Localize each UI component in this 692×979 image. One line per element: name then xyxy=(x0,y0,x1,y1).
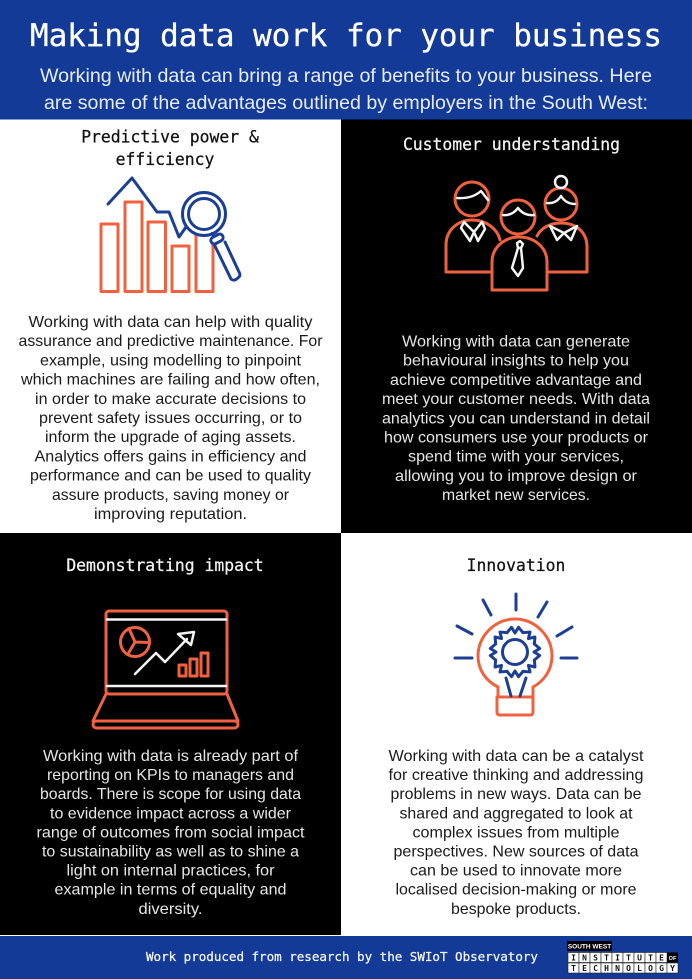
body text: predictive power xyxy=(18,314,323,523)
body text: customer understanding xyxy=(382,334,650,504)
body text: customer understanding: analytics you can understand in detail xyxy=(382,410,650,427)
body text: predictive power: Working with data can help with quality xyxy=(28,314,312,331)
intro text: are some of the advantages outlined by employers in the South West: xyxy=(44,92,648,114)
logo: South West Institute of Technology: T xyxy=(626,954,631,962)
body text: customer understanding: how consumers use your products or xyxy=(384,430,649,446)
footer band xyxy=(0,936,692,979)
logo: South West Institute of Technology: H xyxy=(604,964,609,973)
body text: predictive power: which machines are failing and how often, xyxy=(20,372,320,389)
logo: South West Institute of Technology: I xyxy=(571,954,576,962)
body text: customer understanding: behavioural insights to help you xyxy=(403,353,629,370)
body text: innovation: bespoke products. xyxy=(451,901,581,918)
logo: South West Institute of Technology: E xyxy=(582,964,587,973)
body text: demonstrating impact: range of outcomes from social impact xyxy=(36,824,305,841)
body text: innovation: shared and aggregated to look at xyxy=(400,805,633,822)
logo: South West Institute of Technology: U xyxy=(637,954,642,962)
body text: innovation xyxy=(388,748,644,918)
body text: demonstrating impact: to evidence impact across a wider xyxy=(50,805,292,822)
body text: customer understanding: spend time with your services, xyxy=(408,449,624,466)
body text: demonstrating impact: light on internal practices, for xyxy=(66,863,275,880)
panel: customer understanding xyxy=(341,120,692,533)
intro text xyxy=(40,65,652,114)
intro text: Working with data can bring a range of benefits to your business. Here xyxy=(40,65,652,87)
body text: customer understanding: Working with data can generate xyxy=(402,334,630,350)
logo: South West Institute of Technology: T xyxy=(571,964,576,973)
body text: predictive power: prevent safety issues occurring, or to xyxy=(39,410,302,427)
body text: predictive power: example, using modelling to pinpoint xyxy=(40,352,302,369)
body text: demonstrating impact: Working with data is already part of xyxy=(43,748,299,765)
logo: South West Institute of Technology: OF xyxy=(669,956,677,962)
logo: South West Institute of Technology: I xyxy=(615,954,620,962)
body text: predictive power: Analytics offers gains in efficiency and xyxy=(34,448,306,465)
panel: demonstrating impact xyxy=(0,533,341,935)
body text: predictive power: improving reputation. xyxy=(94,506,247,523)
logo: South West Institute of Technology: SOUTH WEST xyxy=(568,944,611,950)
body text: predictive power: inform the upgrade of aging assets. xyxy=(45,429,296,446)
logo: South West Institute of Technology: S xyxy=(593,954,598,962)
body text: innovation: Working with data can be a catalyst xyxy=(388,748,644,765)
icon: bar chart with magnifier xyxy=(101,178,240,292)
body text: predictive power: assure products, saving money or xyxy=(52,487,290,504)
panel: innovation xyxy=(341,533,692,935)
body text: innovation: complex issues from multiple xyxy=(412,824,620,841)
body text: customer understanding: achieve competitive advantage and xyxy=(390,372,642,389)
logo: South West Institute of Technology: L xyxy=(637,964,642,973)
logo: South West Institute of Technology: N xyxy=(615,964,620,973)
body text: predictive power: performance and can be used to quality xyxy=(30,468,311,485)
body text: demonstrating impact: example in terms of equality and xyxy=(54,882,286,899)
body text: customer understanding: allowing you to improve design or xyxy=(395,468,638,485)
body text: demonstrating impact: to sustainability as well as to shine a xyxy=(42,844,299,860)
body text: customer understanding: market new services. xyxy=(442,487,590,504)
title: Making data work for your business xyxy=(30,18,662,54)
logo: South West Institute of Technology: O xyxy=(648,964,653,973)
icon: laptop with charts xyxy=(93,611,238,728)
body text: innovation: can be used to innovate more xyxy=(410,863,622,880)
logo: South West Institute of Technology: C xyxy=(593,964,598,973)
body text: predictive power: in order to make accurate decisions to xyxy=(35,391,306,408)
heading: predictive power: Predictive power & xyxy=(81,128,259,146)
logo: South West Institute of Technology: T xyxy=(648,954,653,962)
logo: South West Institute of Technology: N xyxy=(582,954,587,962)
body text: demonstrating impact: diversity. xyxy=(138,901,202,918)
body text: innovation: localised decision-making or more xyxy=(396,882,637,899)
logo: South West Institute of Technology: T xyxy=(604,954,609,962)
header band xyxy=(0,0,692,120)
heading: innovation: Innovation xyxy=(467,556,565,575)
body text: demonstrating impact xyxy=(36,748,305,918)
icon: three customers xyxy=(446,176,587,290)
body text: innovation: problems in new ways. Data can be xyxy=(390,786,642,803)
logo: South West Institute of Technology: Y xyxy=(670,964,675,973)
logo: South West Institute of Technology: O xyxy=(626,964,631,973)
logo: South West Institute of Technology: E xyxy=(659,954,664,962)
body text: innovation: perspectives. New sources of data xyxy=(394,844,639,860)
logo: South West Institute of Technology xyxy=(567,941,678,973)
heading: predictive power xyxy=(81,128,259,169)
logo: South West Institute of Technology: G xyxy=(659,964,664,973)
footer credit: Work produced from research by the SWIoT Observatory xyxy=(146,949,538,964)
body text: customer understanding: meet your customer needs. With data xyxy=(382,391,650,408)
body text: demonstrating impact: reporting on KPIs to managers and xyxy=(47,767,294,784)
heading: demonstrating impact: Demonstrating impact xyxy=(66,556,264,575)
body text: predictive power: assurance and predictive maintenance. For xyxy=(18,333,323,350)
heading: customer understanding: Customer understanding xyxy=(403,135,620,154)
icon: light bulb with gear xyxy=(455,594,577,715)
body text: innovation: for creative thinking and addressing xyxy=(388,767,644,784)
body text: demonstrating impact: boards. There is scope for using data xyxy=(40,786,301,803)
heading: predictive power: efficiency xyxy=(116,150,214,169)
panel: predictive power xyxy=(0,120,341,533)
